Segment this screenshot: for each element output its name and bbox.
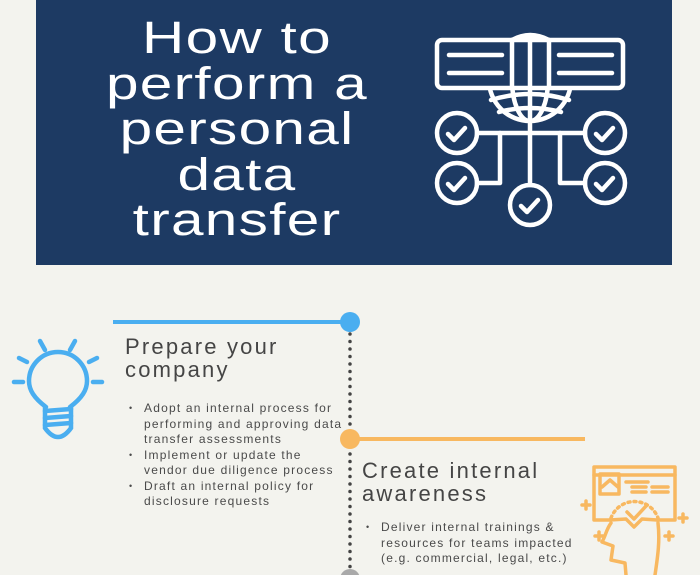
bullet list: (e.g. commercial, legal, etc.): [381, 551, 568, 565]
icon: data transfer globe: [434, 32, 628, 228]
title: How to: [142, 12, 332, 63]
heading: [362, 458, 539, 506]
bullet list: [129, 401, 342, 508]
heading: [125, 334, 279, 382]
heading: Prepare your: [125, 334, 279, 359]
title: data: [177, 148, 297, 200]
heading: Create internal: [362, 458, 539, 483]
section: prepare your company: [125, 334, 342, 508]
bullet list: Deliver internal trainings &: [381, 520, 555, 534]
title: transfer: [133, 194, 341, 245]
header panel: [36, 0, 672, 265]
title: perform a: [106, 58, 368, 108]
bullet list: Draft an internal policy for: [144, 478, 314, 492]
bullet list: [366, 520, 573, 565]
icon: head with window: [580, 465, 689, 575]
bullet list: performing and approving data: [144, 416, 342, 430]
bullet list: transfer assessments: [144, 432, 282, 446]
bullet list: disclosure requests: [144, 494, 270, 508]
title: personal: [120, 103, 354, 154]
heading: company: [125, 357, 230, 382]
heading: awareness: [362, 481, 488, 506]
bullet list: Implement or update the: [144, 448, 302, 462]
icon: light bulb: [12, 338, 104, 440]
section: create internal awareness: [362, 458, 573, 565]
title: [106, 12, 368, 245]
bullet list: vendor due diligence process: [144, 463, 334, 477]
bullet list: Adopt an internal process for: [144, 401, 332, 415]
bullet list: resources for teams impacted: [381, 536, 573, 550]
